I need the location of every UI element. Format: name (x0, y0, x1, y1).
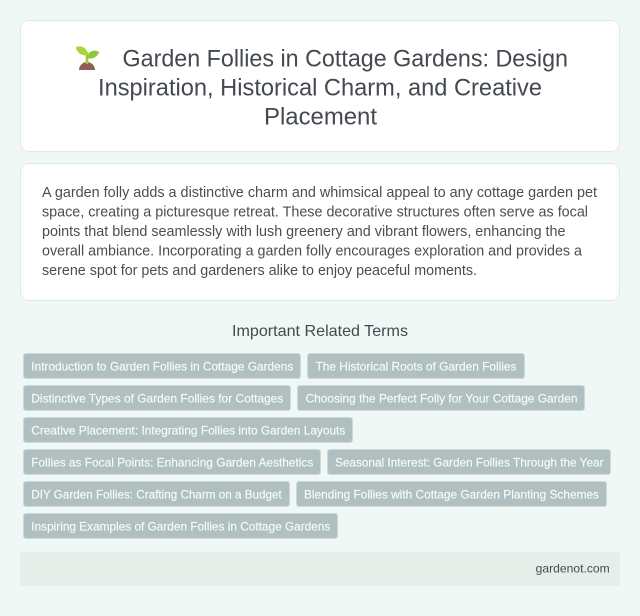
heading: related terms: Important Related Terms (232, 323, 408, 340)
tag: Creative Placement: Integrating Follies into Garden Layouts (31, 424, 345, 438)
paragraph text: points that blend seamlessly with lush greenery and vibrant flowers, enhancing the (42, 224, 566, 240)
tag: DIY Garden Follies: Crafting Charm on a Budget (31, 488, 282, 502)
title text: Garden Follies in Cottage Gardens: Design (122, 46, 568, 72)
tag: Seasonal Interest: Garden Follies Through the Year (335, 456, 604, 470)
tag (298, 386, 584, 410)
title text: Placement (264, 104, 377, 130)
paragraph text: A garden folly adds a distinctive charm and whimsical appeal to any cottage garden pet (42, 185, 597, 201)
footer source text: gardenot.com (536, 562, 610, 576)
tag (328, 450, 610, 474)
tag (24, 514, 338, 538)
title text (98, 46, 568, 130)
icon: seedling (76, 46, 99, 70)
title text: Inspiration, Historical Charm, and Creative (98, 74, 542, 102)
tag (24, 450, 320, 474)
tag (24, 386, 290, 410)
paragraph text: overall ambiance. Incorporating a garden folly encourages exploration and provides a (42, 244, 582, 260)
paragraph text (42, 185, 597, 279)
tag: Choosing the Perfect Folly for Your Cottage Garden (306, 392, 578, 406)
panel: intro paragraph (20, 164, 620, 300)
panel: related term tags (24, 354, 610, 538)
tag (308, 354, 524, 378)
footer (20, 552, 620, 586)
paragraph text: space, creating a picturesque retreat. These decorative structures often serve as focal (42, 204, 588, 220)
tag: Blending Follies with Cottage Garden Planting Schemes (304, 488, 599, 502)
panel: title card (20, 20, 620, 152)
tag: The Historical Roots of Garden Follies (316, 360, 516, 374)
tag (24, 418, 352, 442)
tag (24, 354, 300, 378)
tag: Inspiring Examples of Garden Follies in Cottage Gardens (31, 520, 330, 534)
tag (296, 482, 606, 506)
tag: Follies as Focal Points: Enhancing Garden Aesthetics (31, 456, 313, 470)
paragraph text: serene spot for pets and gardeners alike to enjoy peaceful moments. (42, 263, 477, 279)
tag: Introduction to Garden Follies in Cottage Gardens (31, 360, 293, 374)
tag: Distinctive Types of Garden Follies for Cottages (31, 392, 283, 406)
tag (24, 482, 290, 506)
